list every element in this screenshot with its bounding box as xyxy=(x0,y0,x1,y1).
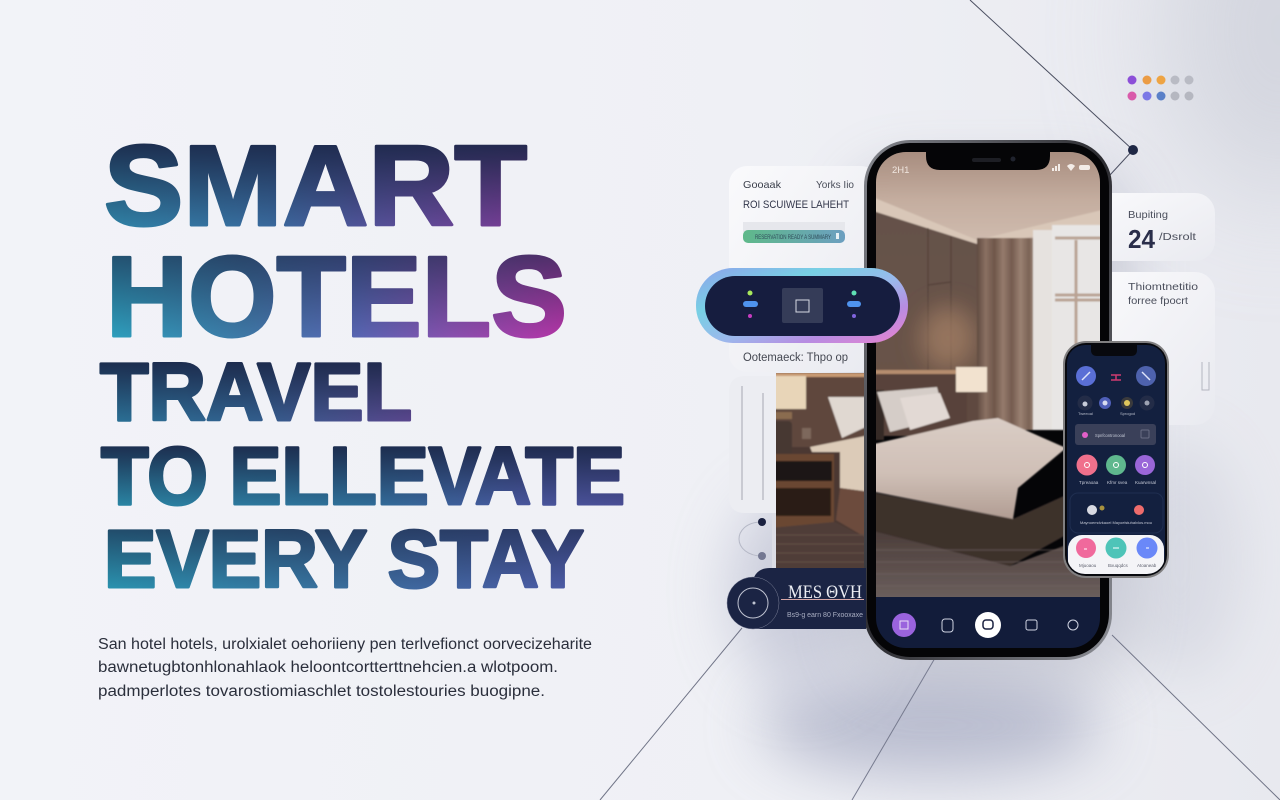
bottom action buttons: Mjuoaou xyxy=(1079,563,1097,568)
small phone xyxy=(1063,341,1169,578)
coloured mode buttons: Kfmr svea xyxy=(1107,480,1128,485)
small notch xyxy=(1091,345,1137,356)
fingerprint panel xyxy=(1070,493,1163,533)
title xyxy=(100,123,625,605)
fingerprint panel: Maynoemdvkaoel Mayoelstuhalvlos.mou xyxy=(1080,520,1152,525)
status pill xyxy=(743,230,845,243)
panel: booking info card xyxy=(729,166,879,372)
panel: right info card: Thiomtnetitio xyxy=(1128,281,1198,293)
decorative connector lines xyxy=(600,0,1280,800)
panel: right booking stat card xyxy=(1090,193,1215,261)
body paragraph: San hotel hotels, urolxialet oehoriieny pen terlvefionct oorvecizeharite xyxy=(98,636,592,653)
panel: right booking stat card: /Dsrolt xyxy=(1159,231,1196,243)
control capsule xyxy=(696,268,908,343)
colour palette dots xyxy=(1128,76,1194,100)
panel: right info card xyxy=(1090,272,1215,425)
main phone xyxy=(864,140,1112,660)
bottom action buttons: Bxuqqdcs xyxy=(1108,563,1129,568)
coloured mode buttons: Tpreaoaa xyxy=(1079,480,1099,485)
dark title badge: Bs9-g earn 80 Fxooxaxe xyxy=(787,612,863,619)
bottom action buttons: Atoaneab xyxy=(1137,563,1157,568)
top circle icons xyxy=(1076,366,1156,386)
small icon row: Sprogod xyxy=(1120,411,1135,416)
status bar card xyxy=(1075,424,1156,445)
small icon row xyxy=(1078,396,1154,416)
notch xyxy=(926,152,1050,170)
status time: 2H1 xyxy=(892,165,909,176)
body paragraph xyxy=(98,636,592,700)
title line: to ellevate: TO ELLEVATE xyxy=(101,431,625,522)
panel: booking info card: Ootemaeck: Thpo op xyxy=(743,352,848,364)
hotel room photo: main screen xyxy=(870,148,1106,648)
coloured mode buttons: Kuarwnsal xyxy=(1135,480,1156,485)
panel: booking info card: Gooaak xyxy=(743,179,782,191)
panel: booking info card: ROI SCUIWEE LAHEHT xyxy=(743,199,849,211)
small phone screen xyxy=(1067,345,1165,574)
small icon row: Tweeoal xyxy=(1078,411,1093,416)
bottom nav: grid icon xyxy=(942,619,953,632)
title line: travel: TRAVEL xyxy=(100,347,412,438)
panel: right booking stat card: Bupiting xyxy=(1128,209,1168,221)
central square xyxy=(782,288,823,323)
bottom nav: purple button xyxy=(892,613,916,637)
status pill: RESERVATION READY A SUMMARY xyxy=(755,234,831,241)
title line: every stay: EVERY STAY xyxy=(104,514,584,605)
title line: smart: SMART xyxy=(104,123,527,250)
panel: right info card: forree fpocrt xyxy=(1128,295,1188,307)
title line: hotels: HOTELS xyxy=(106,234,567,361)
body paragraph: bawnetugbtonhlonahlaok heloontcortterttnehcien.a wlotpoom. xyxy=(98,659,558,676)
panel: lower left side card xyxy=(729,376,780,569)
dark title badge: MES ΘVH xyxy=(788,582,862,603)
bottom nav: white button xyxy=(975,612,1001,638)
dark title badge xyxy=(727,568,866,629)
status icons xyxy=(1052,164,1090,171)
coloured mode buttons xyxy=(1076,454,1156,485)
connector arc with dots xyxy=(739,518,766,560)
bottom action buttons xyxy=(1076,538,1158,568)
status bar card: Spnfcontronooal xyxy=(1095,433,1125,438)
connector node xyxy=(1128,145,1138,155)
body paragraph: padmperlotes tovarostiomiaschlet tostolestouries buogipne. xyxy=(98,683,545,700)
panel: right booking stat card: 24 xyxy=(1128,224,1156,254)
phone frame xyxy=(864,140,1112,660)
panel: booking info card: Yorks Iio xyxy=(816,180,854,191)
hotel room photo: left xyxy=(776,373,864,568)
bottom nav: clock icon xyxy=(1068,620,1078,630)
soft phone shadow xyxy=(850,170,1130,680)
bottom nav: book icon xyxy=(1026,620,1037,630)
